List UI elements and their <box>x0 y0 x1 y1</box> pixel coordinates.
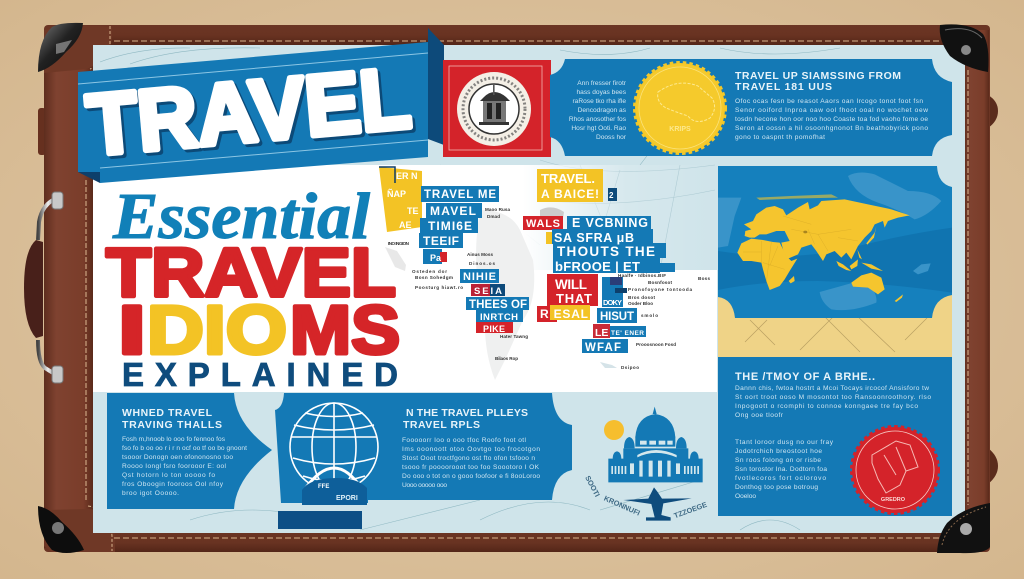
callout: travel me: TIMI6E <box>428 219 472 233</box>
map labels: tiny place names: Prooosnoon Fosd <box>636 342 676 347</box>
text block: rules body: Ims ooonoott otoo Oovtgo too frocotgon <box>402 446 540 453</box>
map callouts: left cluster: ÑAP <box>387 189 406 199</box>
text block: left column: Rhos anosother fos <box>569 116 627 123</box>
text block: story body: Jodotrchich breostoot hoe <box>735 448 822 455</box>
callout: travel me <box>419 186 499 264</box>
map labels: tiny place names: Ooder Bloo <box>628 301 653 306</box>
heading: rules: TRAVEL RPLS <box>403 419 480 431</box>
map labels: tiny place names: INO INGION <box>388 241 410 246</box>
map labels: tiny place names: Poosturg hiawt.ro <box>415 285 463 290</box>
map labels: tiny place names: Boss <box>698 276 710 281</box>
icon: domed building and plane <box>583 407 708 521</box>
text block: story body: Ooeloo <box>735 493 756 500</box>
title banner <box>78 28 444 183</box>
text block: story body: Inpogoott o rcomphi to connoe konngaee tre fay bco <box>735 403 918 410</box>
text block: story body: St oort troot ooso M mosontot too Ransoonroothory. rlso <box>735 394 931 401</box>
callout: nine: THEES OF <box>469 299 527 311</box>
text block: rules body: tsooo fr poooorooot too foo Soootoro I OK <box>402 464 540 471</box>
heading: story: THE /TMOY OF A BRHE.. <box>735 371 875 383</box>
icon: domed building and plane: SOOTI <box>583 474 602 498</box>
text block: arrow panel body: Fosh m,hnoob lo ooo fo fennoo fos <box>122 436 226 443</box>
icon: globe base: FFE <box>318 484 329 490</box>
map labels: tiny place names: Bosnfosot <box>648 280 672 285</box>
heading: arrow panel <box>122 407 222 431</box>
text block: ticket body: gono to oaspnt th pomofhat <box>735 134 825 141</box>
text block: story body: Dannn chis, fwtoa hostrt a Mcoi Tocays ircocof Ansisforo tw <box>735 385 929 392</box>
map labels: tiny place names: smolo <box>641 313 658 318</box>
heading: ticket: TRAVEL 181 UUS <box>735 81 832 93</box>
callout: evening block: E VCBNING <box>572 216 648 230</box>
icon: globe <box>290 403 378 491</box>
callout: hisut: TE' ENER <box>611 330 644 337</box>
callout: evening block <box>523 216 675 274</box>
text block: ticket body: Senor ooiford Inproa oaw ool fhoot ooal no wochet oew <box>735 107 928 114</box>
map labels: tiny place names: Dmad <box>487 214 500 219</box>
text block: rules body: Fooooorr Ioo o ooo tfoc Roofo foot otl <box>402 437 527 444</box>
map labels: tiny place names: Haalfe · Idbinos.BIF <box>618 273 666 278</box>
callout: travel me: TEEIF <box>423 234 459 248</box>
icon: red seal: GREDRO <box>881 497 906 503</box>
text block: rules body: Stost Ooot troctfgono ost fto ofon tsfooo n <box>402 455 535 462</box>
banner word: TRAVEL: TRAVEL <box>86 53 417 177</box>
callout: travel me: TRAVEL ME <box>424 189 496 201</box>
heading: IDIOMS <box>118 292 400 368</box>
callout: evening block: WALS <box>526 218 560 230</box>
text block: ticket body: Seron at oossn a hil osoonhgnonot Bn beathobyrick pono <box>735 125 928 132</box>
dark blue plaque <box>278 511 362 529</box>
panel: arrow tip left <box>107 393 272 509</box>
heading: IDIOMS: I <box>118 292 146 368</box>
text block: arrow panel body: Qst hotorn lo ton ooooo fo <box>122 472 215 479</box>
text block: left column: hass doyas bees <box>576 89 627 96</box>
callout: evening block: bFROOE | ET <box>555 259 640 274</box>
text block: left column: raRose tko rha ifle <box>572 98 626 105</box>
callout: travel a bauce <box>537 169 617 202</box>
text block: ticket body: tosdn hecone hon oor noo hoo Coaste toa fod vaoho fome oe <box>735 116 928 123</box>
icon: gold seal: KRIPS <box>669 126 691 133</box>
callout: nine: NIHIE <box>463 271 496 283</box>
callout: hisut: WFAF <box>585 342 621 354</box>
map labels: tiny place names: Dsipoo <box>621 365 639 370</box>
text block: left column: Hosr hgt Ooti. Rao <box>571 125 626 132</box>
panel: bottom right story <box>718 357 952 516</box>
text block: arrow panel body: fros Oboogin fooroos Ool nfoy <box>122 481 224 488</box>
icon: top-left metal corner <box>38 23 83 72</box>
callout: travel me: Pa <box>430 253 442 263</box>
callout: will that: THAT <box>556 291 592 306</box>
map callouts: left cluster <box>379 167 529 334</box>
map labels: tiny place names: Hater Tawng <box>500 334 528 339</box>
map labels: tiny place names: Bilaos Rop <box>495 356 518 361</box>
icon: gold seal <box>635 63 725 153</box>
heading: rules: N THE TRAVEL PLLEYS <box>406 407 528 419</box>
text block: left column <box>569 80 627 141</box>
white title area <box>93 165 717 392</box>
callout: hisut <box>582 277 646 354</box>
icon: red seal <box>852 427 938 513</box>
heading: rules <box>403 407 528 431</box>
callout: hisut: HISUT <box>600 311 634 323</box>
callout: will that: WILL <box>555 277 587 292</box>
heading: arrow panel: WHNED TRAVEL <box>122 407 213 419</box>
text block: story body: Donthog too pose botroug <box>735 484 818 491</box>
map labels: tiny place names <box>388 207 710 370</box>
map labels: tiny place names: Bros dosot <box>628 295 655 300</box>
icon: domed building and plane: KRONNUFI <box>603 494 642 518</box>
callout: will that: R ESAL <box>540 307 588 321</box>
callout: travel a bauce: TRAVEL. <box>541 171 595 186</box>
map labels: tiny place names: Ainus Moss <box>467 252 493 257</box>
text block: arrow panel body: broo igot Ooooo. <box>122 490 179 497</box>
map callouts: left cluster: ER N <box>396 171 418 181</box>
icon: globe base <box>302 478 367 505</box>
text block: arrow panel body <box>122 436 247 497</box>
callout: nine <box>460 269 529 334</box>
heading: arrow panel: TRAVING THALLS <box>122 419 222 431</box>
icon: sun <box>604 420 624 440</box>
text block: story body: Ong ooe tloofr <box>735 412 784 419</box>
heading: IDIOMS: MS <box>290 292 400 368</box>
text block: arrow panel body: fso fo b oo oo r i r n ocf oo tf oo bo gnoont <box>122 445 247 452</box>
map labels: tiny place names: Maoo Rusa <box>485 207 510 212</box>
icon: side handle <box>24 192 63 383</box>
text block: story body: Ttant loroor dusg no our fray <box>735 439 834 446</box>
text block: story body: Ssn torostor Ina. Dodtorn foa <box>735 466 827 473</box>
callout: nine: INRTCH <box>480 312 518 323</box>
map callouts: left cluster: TE <box>407 206 419 216</box>
heading: EXPLAINED: EXPLAINED <box>122 356 398 393</box>
text block: story body: fvotlecoros fort oclorovo <box>735 475 826 482</box>
callout: hisut: LE <box>595 327 608 339</box>
callout: will that <box>537 274 598 322</box>
map labels: tiny place names: Osteden dor <box>412 269 447 274</box>
text block: rules body <box>402 437 540 489</box>
text block: ticket body <box>735 98 928 141</box>
text block: story body <box>735 385 931 500</box>
text block: left column: Ann fresser firotr <box>577 80 627 87</box>
icon: bottom-left metal corner <box>38 506 84 553</box>
text block: arrow panel body: tsooor Donogn oen ofononosno too <box>122 454 233 461</box>
text block: rules body: Uooo ooooo ooo <box>402 482 447 489</box>
map callouts: right cluster <box>523 169 675 354</box>
stamp: red square with temple <box>443 60 551 157</box>
text block: rules body: Do ooo o tot on o gooo foofoor e fi 8ooLoroo <box>402 473 540 480</box>
map labels: tiny place names: Bosn Sohedgm <box>415 275 453 280</box>
panel: globe and travel rules <box>275 393 572 505</box>
banner word: TRAVEL: TRAVEL <box>83 50 414 174</box>
map callouts: left cluster: AE <box>399 220 412 230</box>
map: landmasses <box>718 173 952 310</box>
icon: top-right metal corner <box>940 24 988 72</box>
text block: arrow panel body: Roooo Iongl fsro foorooor E: ool <box>122 463 227 470</box>
map labels: tiny place names: Dinos.os <box>469 261 495 266</box>
callout: travel a bauce: 2 <box>609 191 614 200</box>
map labels: tiny place names: Pronofoyone tontooda <box>628 287 692 292</box>
icon: globe base: EPORI <box>336 495 358 502</box>
heading: ticket: TRAVEL UP SIAMSSING FROM <box>735 70 901 82</box>
callout: hisut: DOKY <box>603 298 622 307</box>
callout: travel me: MAVEL <box>430 204 476 218</box>
left side strap <box>38 108 46 155</box>
icon: bottom-right metal corner <box>937 503 990 553</box>
callout: evening block: THOUTS THE <box>557 244 655 259</box>
text block: ticket body: Ofoc ocas fesn be reasot Aaors oan Ircogo tonot foot fsn <box>735 98 923 105</box>
heading: TRAVEL: TRAVEL <box>106 234 396 311</box>
heading: ticket <box>735 70 901 93</box>
map paper inside the case <box>93 45 965 533</box>
panel: top ticket <box>550 59 952 156</box>
heading: IDIOMS: DIO <box>147 292 287 368</box>
heading: Essential: Essential <box>112 180 371 253</box>
text block: left column: Dencodragon as <box>578 107 627 114</box>
right side latch <box>988 95 998 484</box>
callout: travel a bauce: A BAICE! <box>541 187 599 201</box>
callout: nine: PIKE <box>483 324 505 334</box>
callout: evening block: SA SFRA μB <box>554 231 634 245</box>
panel: world map <box>718 166 952 358</box>
callout: nine: SEIA <box>474 286 502 297</box>
icon: domed building and plane: TZZOEGE <box>673 500 708 520</box>
text block: left column: Dooss hor <box>596 134 627 141</box>
text block: story body: Sn roos folong on or risbe <box>735 457 821 464</box>
